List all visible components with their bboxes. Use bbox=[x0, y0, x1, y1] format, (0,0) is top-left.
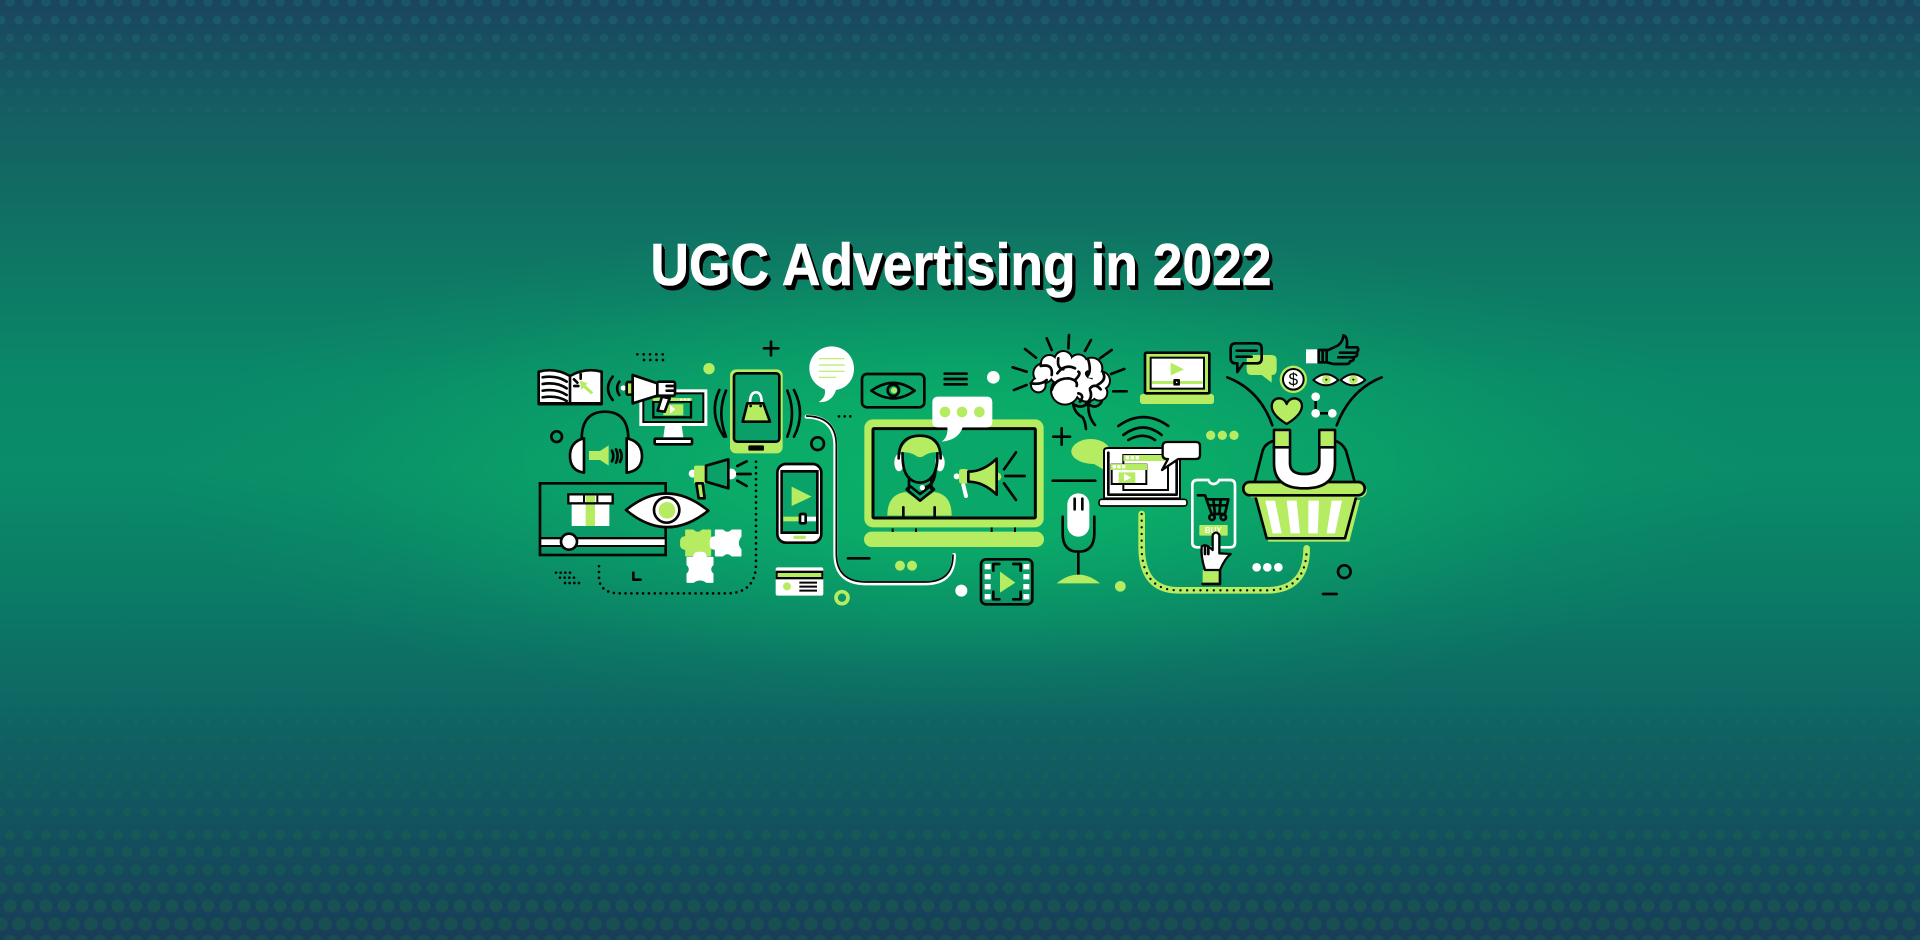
icon: big eye bbox=[626, 493, 708, 527]
monitor frame bbox=[864, 419, 1044, 527]
decoration: corner mark bbox=[633, 573, 641, 580]
icon: hamburger lines bbox=[945, 374, 967, 384]
illustration: left half bbox=[539, 342, 1044, 604]
decoration: black ring bbox=[1338, 565, 1351, 578]
icon: shopping basket with magnet bbox=[1243, 430, 1367, 542]
decoration: lime dots row bbox=[1206, 431, 1239, 440]
decoration: white dot lower bbox=[955, 585, 967, 597]
icon: puzzle pieces bbox=[681, 530, 741, 582]
connector: dotted path bbox=[599, 462, 756, 593]
icon: video laptop bbox=[1140, 353, 1214, 404]
icon: chat bubbles bbox=[1231, 343, 1277, 383]
icon: heart bbox=[1272, 398, 1302, 424]
presenter figure bbox=[887, 436, 952, 517]
decoration: lime dots bbox=[895, 561, 917, 571]
icon: shopping app phone: BUY bbox=[1205, 526, 1222, 535]
decoration: small dots bbox=[839, 412, 855, 420]
icon: shopping phone bbox=[715, 369, 800, 453]
decoration: small dot cluster bbox=[556, 573, 581, 583]
panel: video player with gift bbox=[540, 483, 666, 555]
icon: pointing hand bbox=[1201, 532, 1231, 584]
icon: minus line bbox=[1053, 477, 1095, 485]
connector: magnet field lines bbox=[1227, 377, 1382, 425]
decoration: lime dot bbox=[1115, 581, 1126, 592]
icon: pair of eyes bbox=[1313, 374, 1365, 385]
illustration: right half bbox=[955, 335, 1382, 604]
decoration: black ring bbox=[551, 431, 562, 442]
icon: lime oval speech bubble bbox=[1071, 439, 1110, 469]
icon: microphone bbox=[1057, 493, 1100, 583]
connector: curved tube bbox=[807, 416, 954, 583]
icon: plus sign bbox=[764, 342, 778, 355]
icon: thumbs up bbox=[1306, 335, 1358, 364]
decoration: lime dot bbox=[703, 363, 715, 374]
icon: white speech bubble bbox=[809, 346, 854, 402]
decoration: white dot bbox=[987, 371, 1000, 384]
presenter megaphone bbox=[954, 452, 1025, 500]
icon: eye in rectangle bbox=[862, 374, 924, 407]
decoration: dash bbox=[1323, 590, 1337, 598]
icon: plus sign bbox=[1053, 428, 1070, 445]
monitor stand bar bbox=[864, 532, 1044, 547]
icon: dollar coin: $ bbox=[1289, 370, 1299, 390]
decoration: minus sign bbox=[848, 554, 869, 562]
decoration: top dots bbox=[637, 354, 669, 360]
icon: desktop monitor bbox=[641, 391, 706, 444]
icon: credit card bbox=[776, 567, 823, 596]
background dot pattern: bottom bbox=[1, 614, 1920, 940]
icon: dollar coin bbox=[1280, 366, 1307, 393]
monitor screen bbox=[873, 429, 1035, 518]
icon: headphones bbox=[570, 412, 642, 473]
icon: network nodes bbox=[1311, 392, 1337, 418]
speech bubble with three dots bbox=[932, 397, 992, 442]
icon: white megaphone bbox=[608, 375, 675, 412]
decoration: white dots row bbox=[1252, 563, 1283, 572]
monitor legs bbox=[893, 527, 1015, 532]
panel: presenter screen bbox=[864, 397, 1044, 547]
icon: open book bbox=[539, 370, 602, 405]
connector: lime dotted path bbox=[1142, 514, 1307, 590]
title: UGC Advertising in 2022 bbox=[650, 232, 1272, 298]
icon: shopping app phone bbox=[1192, 480, 1235, 547]
icon: wifi laptop with windows bbox=[1099, 417, 1200, 506]
icon: video phone bbox=[777, 464, 821, 543]
decoration: black ring bbox=[811, 437, 824, 450]
decoration: lime ring bbox=[836, 592, 848, 604]
icon: film play bbox=[981, 559, 1032, 604]
icon: brain bbox=[1013, 335, 1127, 429]
icon: lime megaphone bbox=[689, 459, 751, 498]
background dot pattern: top bbox=[1, 2, 1920, 164]
